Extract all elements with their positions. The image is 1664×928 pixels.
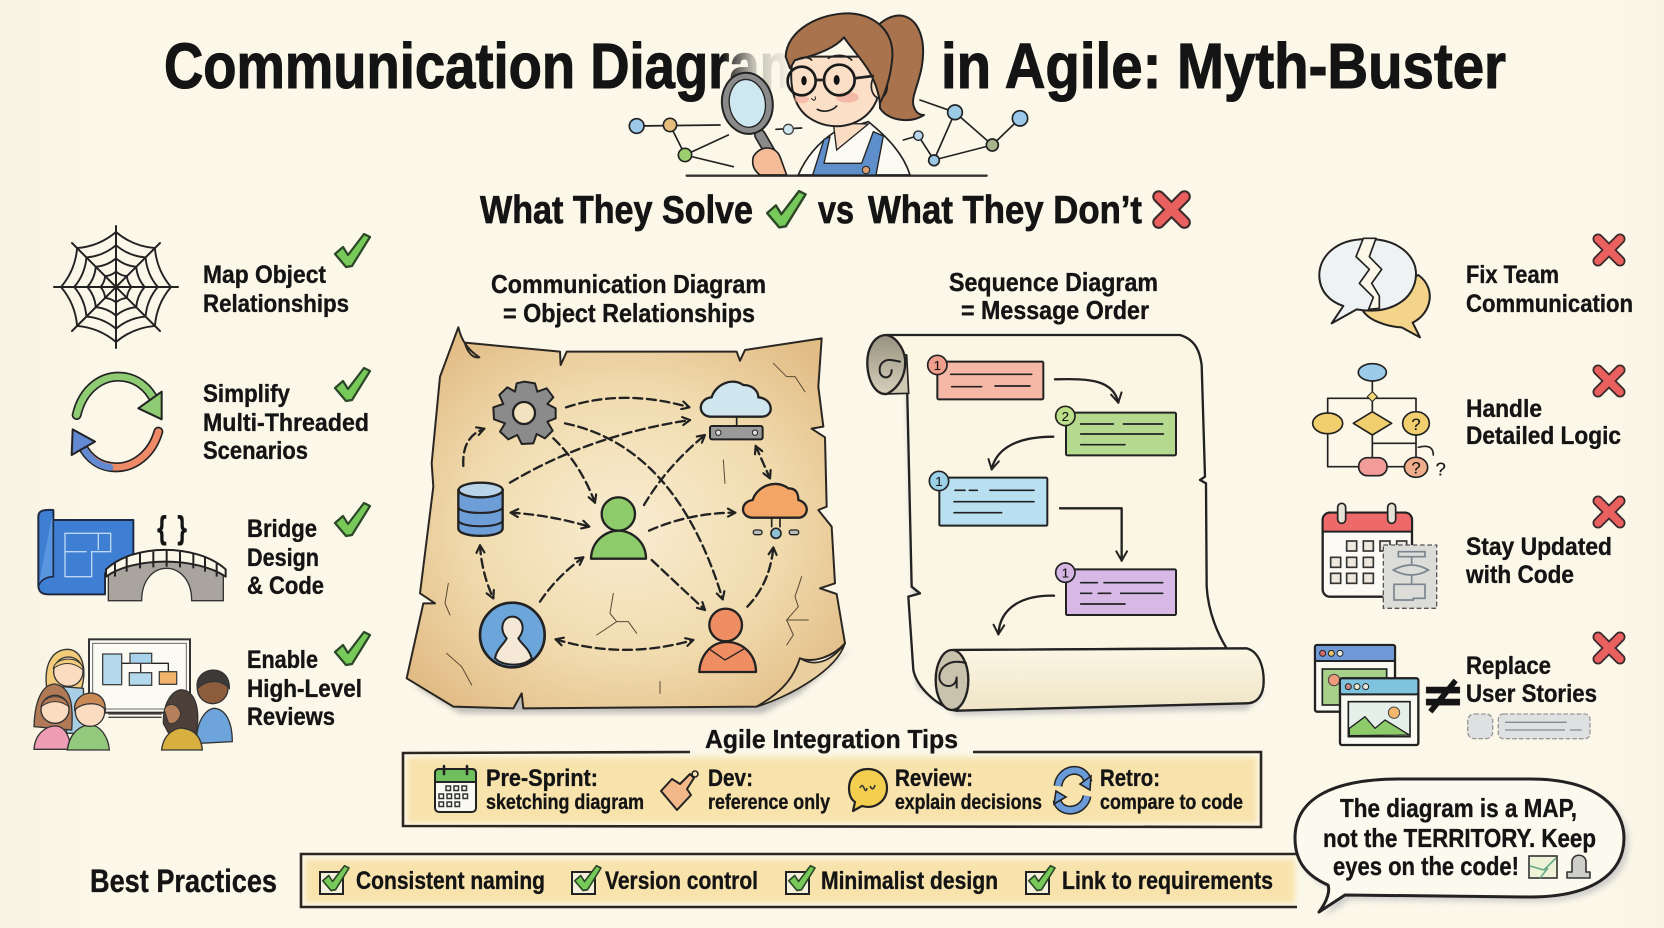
step 1: red message box xyxy=(928,355,1043,399)
item: fix team communication: Fix Team xyxy=(1466,261,1559,289)
item: replace user stories xyxy=(1466,637,1620,708)
subheading xyxy=(480,189,1184,232)
step 1: red message box: 1 xyxy=(934,358,941,373)
item: map object relationships: Relationships xyxy=(203,290,349,318)
icon: green user xyxy=(591,497,646,559)
icon: calendar with stale diagram xyxy=(1323,503,1437,608)
item: handle detailed logic: Detailed Logic xyxy=(1466,422,1621,450)
blush, mouth and eyes xyxy=(788,55,873,111)
item: map object relationships: Map Object xyxy=(203,261,327,289)
item: map object relationships xyxy=(203,234,370,318)
top roll xyxy=(867,335,909,394)
panel: sequence diagram scroll xyxy=(867,335,1264,715)
dashed arrows xyxy=(463,398,773,650)
item: stay updated with code: Stay Updated xyxy=(1466,533,1612,561)
item: enable high-level reviews: High-Level xyxy=(247,675,362,703)
icon: flowchart: ? xyxy=(1411,459,1421,478)
arrow out of step 4 xyxy=(998,596,1054,634)
step 4: purple message box: 1 xyxy=(1062,566,1069,581)
item: bridge design and code: Design xyxy=(247,544,319,572)
heading: best practices: Best Practices xyxy=(90,863,277,899)
subheading: vs xyxy=(818,189,854,232)
heading: communication diagram: Communication Diagram xyxy=(491,269,766,299)
item: bridge design and code: Bridge xyxy=(247,515,317,543)
practice: version control xyxy=(572,866,758,895)
icon: blueprint and bridge: { } xyxy=(155,509,189,548)
title xyxy=(164,30,1506,105)
item: replace user stories: User Stories xyxy=(1466,680,1597,708)
heading: communication diagram xyxy=(491,269,766,328)
heading: sequence diagram: Sequence Diagram xyxy=(949,267,1158,297)
map parchment xyxy=(407,327,845,708)
heading: sequence diagram: = Message Order xyxy=(961,295,1149,325)
magnifying glass xyxy=(718,69,787,175)
tip: review: explain decisions xyxy=(895,791,1042,814)
callout: speech bubble: The diagram is a MAP, xyxy=(1340,793,1577,823)
subheading: What They Don’t xyxy=(868,189,1142,232)
step 2: green message box: 2 xyxy=(1062,409,1069,424)
panel: best practices xyxy=(301,854,1297,907)
callout: speech bubble: eyes on the code! xyxy=(1333,851,1519,881)
callout: speech bubble: not the TERRITORY. Keep xyxy=(1323,823,1596,853)
item: fix team communication: Communication xyxy=(1466,290,1633,318)
face xyxy=(791,57,881,126)
icon: flowchart xyxy=(1313,364,1446,479)
symbol: not equal: ≠ xyxy=(1420,663,1466,726)
icon: orange cloud xyxy=(743,484,807,538)
practice: consistent naming: Consistent naming xyxy=(356,867,545,895)
tip: pre-sprint: Pre-Sprint: xyxy=(486,765,598,792)
item: bridge design and code: & Code xyxy=(247,572,324,600)
item: stay updated with code: with Code xyxy=(1465,561,1574,589)
step 3: blue message box: 1 xyxy=(935,474,943,489)
practice: minimalist design xyxy=(786,866,998,895)
arrow 2 to 3 xyxy=(992,437,1053,469)
step 3: blue message box xyxy=(929,471,1047,526)
icon: database xyxy=(458,483,503,536)
step 2: green message box xyxy=(1056,406,1176,455)
practice: version control: Version control xyxy=(605,867,758,895)
step 4: purple message box xyxy=(1056,563,1176,615)
hair xyxy=(786,13,892,103)
item: enable high-level reviews: Reviews xyxy=(247,703,335,731)
icon: broken speech bubbles xyxy=(1319,238,1430,337)
tip: retro xyxy=(1054,765,1243,814)
practice: link to requirements: Link to requirements xyxy=(1062,867,1273,895)
icon: gear xyxy=(493,382,556,444)
subheading: What They Solve xyxy=(480,189,753,232)
icon: spider web xyxy=(54,226,178,348)
icon: code stamp xyxy=(1567,855,1590,878)
tip: pre-sprint: sketching diagram xyxy=(486,791,644,814)
title: Communication Diagram xyxy=(164,30,808,102)
item: fix team communication xyxy=(1466,239,1633,318)
title: in Agile: Myth-Buster xyxy=(941,30,1506,102)
icon: orange user xyxy=(699,609,756,672)
tip: dev: reference only xyxy=(708,791,830,814)
icon: faded story card xyxy=(1468,714,1590,739)
bottom roll xyxy=(936,648,1264,711)
ponytail xyxy=(878,16,924,120)
network nodes right xyxy=(903,100,1028,166)
item: simplify multi-threaded scenarios: Scenarios xyxy=(203,437,308,465)
heading: sequence diagram xyxy=(949,267,1158,325)
icon: user story screens xyxy=(1315,645,1418,745)
icon: flowchart: ? xyxy=(1435,458,1446,479)
panel: agile integration tips xyxy=(403,752,1261,827)
item: simplify multi-threaded scenarios: Multi-Threaded xyxy=(203,409,369,437)
item: enable high-level reviews xyxy=(247,632,370,731)
panel: what they solve (left column) xyxy=(34,226,370,750)
ear xyxy=(871,74,887,98)
tip: review: Review: xyxy=(895,765,973,792)
shirt and overalls xyxy=(798,122,910,175)
network nodes left xyxy=(629,118,802,167)
tip: retro: Retro: xyxy=(1100,765,1160,792)
icon: blueprint and bridge xyxy=(38,509,226,601)
heading: communication diagram: = Object Relationships xyxy=(503,298,755,328)
icon: cloud server xyxy=(701,382,771,439)
icon: blue user circle xyxy=(480,603,545,667)
panel: treasure map communication diagram xyxy=(407,327,852,713)
practice: consistent naming xyxy=(320,866,545,895)
icon: mini map xyxy=(1529,856,1557,878)
map cracks xyxy=(445,363,808,693)
item: handle detailed logic xyxy=(1466,370,1621,450)
item: replace user stories: Replace xyxy=(1466,652,1551,680)
tip: dev: Dev: xyxy=(708,765,753,792)
arrow 3 to 4 xyxy=(1060,508,1122,561)
item: stay updated with code xyxy=(1465,501,1620,589)
heading: agile integration tips: Agile Integration Tips xyxy=(705,724,958,754)
item: simplify multi-threaded scenarios xyxy=(203,368,370,465)
illustration: girl with magnifying glass and network xyxy=(629,13,1028,176)
scroll sheet xyxy=(887,335,1227,711)
callout: speech bubble xyxy=(1295,779,1629,917)
tip: dev xyxy=(661,765,830,814)
practice: minimalist design: Minimalist design xyxy=(821,867,998,895)
tip: pre-sprint xyxy=(435,765,644,814)
panel: what they don't solve (right column) xyxy=(1313,238,1633,745)
item: bridge design and code xyxy=(247,503,370,600)
item: simplify multi-threaded scenarios: Simplify xyxy=(203,380,290,408)
item: enable high-level reviews: Enable xyxy=(247,646,318,674)
icon: team reviewing whiteboard xyxy=(34,639,232,750)
icon: flowchart: ? xyxy=(1411,415,1421,434)
tip: retro: compare to code xyxy=(1100,791,1243,814)
icon: cycle arrows xyxy=(72,377,162,467)
tip: review xyxy=(849,765,1042,814)
arrow 1 to 2 xyxy=(1055,379,1118,403)
item: handle detailed logic: Handle xyxy=(1466,395,1542,423)
